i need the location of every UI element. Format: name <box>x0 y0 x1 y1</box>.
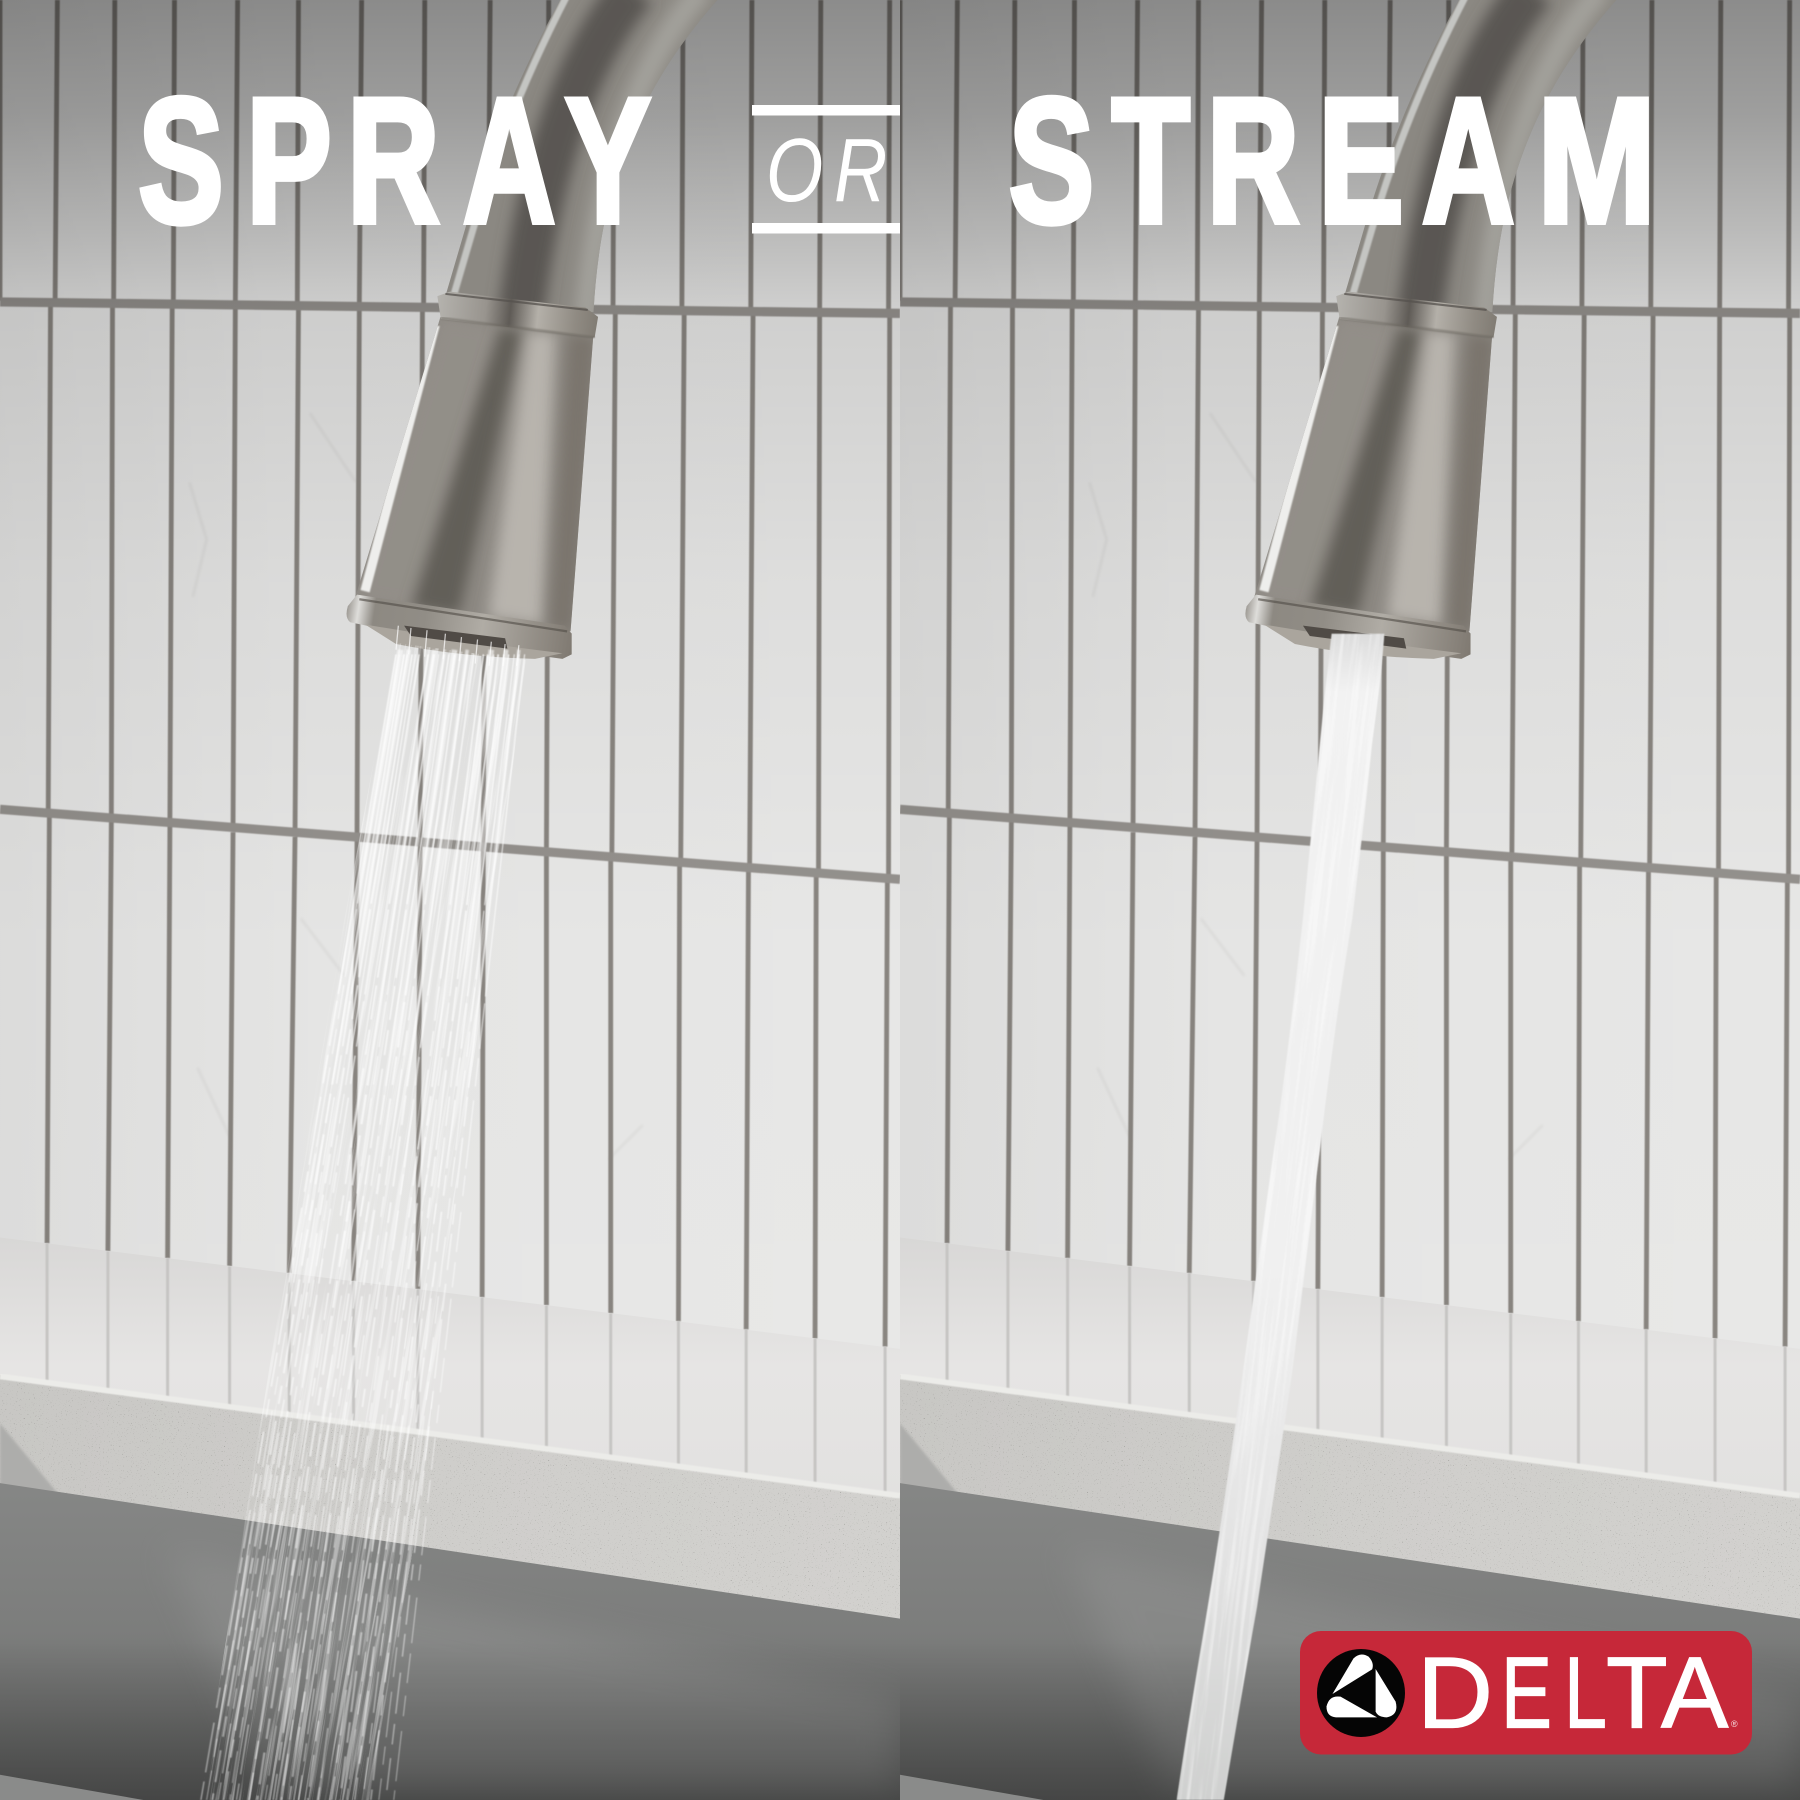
logo: Delta badge <box>1300 1631 1752 1754</box>
panel: stream <box>900 0 1800 1800</box>
wordmark: DELTA: D <box>1417 1638 1493 1750</box>
wordmark: DELTA: E <box>1501 1638 1552 1750</box>
wordmark: DELTA: L <box>1564 1638 1607 1750</box>
spray water <box>200 644 526 1800</box>
title: STREAM: STREA <box>1009 61 1515 260</box>
icon: Delta triangle mark <box>1317 1649 1405 1737</box>
stream water ribbon <box>1176 632 1385 1800</box>
faucet with stream nozzle <box>1245 0 1616 659</box>
label: OR between rules: OR <box>766 121 887 221</box>
wordmark: DELTA: TA <box>1606 1638 1729 1750</box>
nozzle spray jets <box>396 626 519 666</box>
background: tiled wall, counter and sink <box>900 0 1800 1800</box>
title: SPRAY: SPRAY <box>138 61 651 260</box>
label: OR between rules <box>752 105 900 234</box>
title: STREAM: M <box>1537 61 1656 260</box>
background: tiled wall, counter and sink <box>0 0 900 1800</box>
registered mark: ® <box>1731 1719 1738 1729</box>
faucet with spray nozzle <box>347 0 717 659</box>
panel: spray <box>0 0 900 1800</box>
